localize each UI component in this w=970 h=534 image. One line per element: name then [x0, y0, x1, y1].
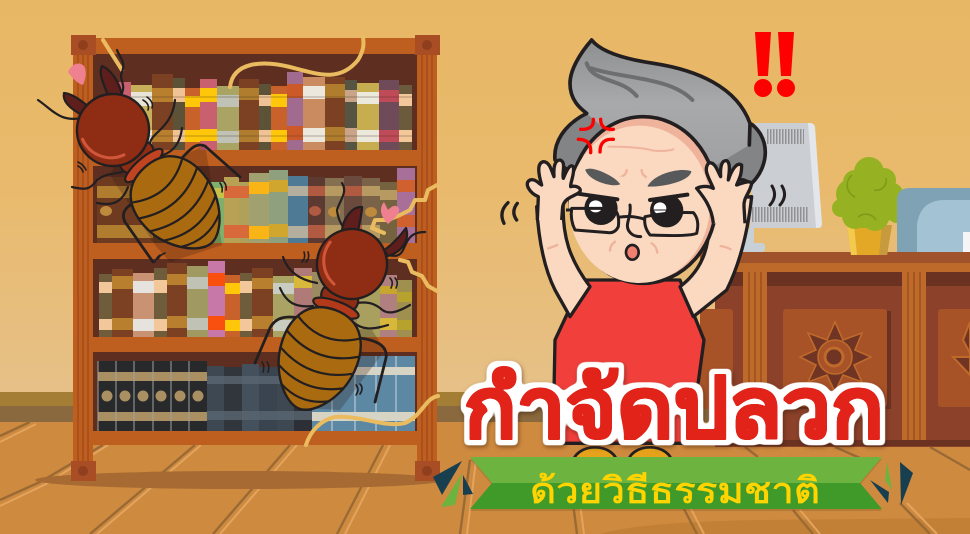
hair strands: [587, 63, 692, 100]
books row 1: [115, 72, 412, 150]
ribbon decoration right: [870, 462, 913, 505]
left column: [73, 55, 93, 462]
computer monitor: [740, 123, 822, 252]
shelf 1: [93, 150, 417, 166]
termite mandibles: [342, 207, 407, 256]
heart right: [381, 202, 399, 224]
left hand: [527, 160, 580, 220]
eyebrows: [586, 169, 691, 186]
termite shadow: [110, 145, 222, 262]
books row 3: [99, 261, 412, 337]
shelf 3: [93, 337, 417, 352]
anger mark: [578, 119, 613, 153]
heart left: [68, 64, 86, 85]
right arm: [680, 197, 752, 317]
termite upper left: [38, 50, 241, 269]
desk column right: [902, 272, 926, 440]
books row 4: [98, 356, 415, 431]
shirt: [553, 280, 704, 443]
shelf 2: [93, 243, 417, 259]
termite body: [60, 77, 241, 269]
back hair: [555, 87, 765, 183]
termite motion marks: [78, 97, 226, 262]
desk: [700, 252, 970, 447]
blue armchair: [897, 188, 970, 252]
bookcase top bar: [78, 38, 433, 54]
ribbon banner: [470, 457, 882, 511]
bookcase floor shadow: [35, 471, 445, 489]
shelf 4: [93, 431, 417, 445]
wooden floor: [0, 422, 970, 534]
termite shadow: [300, 325, 385, 410]
corner block top right: [415, 35, 440, 55]
termite trail squiggles: [103, 37, 438, 445]
nose: [627, 205, 641, 237]
bookcase: [71, 35, 440, 481]
motion marks left: [502, 203, 517, 223]
books row 2: [97, 168, 415, 243]
foot left: [71, 461, 96, 481]
termite mandibles: [64, 66, 122, 116]
termite motion marks: [262, 252, 397, 395]
desk panel left: [700, 309, 733, 409]
exclamation marks: [754, 32, 795, 97]
desk panel right with star: [938, 309, 970, 407]
desk panel centre with star: [783, 309, 891, 409]
foot right: [415, 461, 440, 481]
front hair: [570, 40, 750, 167]
feet: [573, 447, 672, 479]
monitor motion marks: [770, 186, 785, 205]
ribbon decoration left: [433, 461, 473, 507]
termite legs and antennae: [38, 50, 240, 262]
right column: [417, 55, 437, 462]
right hand: [697, 161, 752, 223]
desk column left: [743, 272, 767, 440]
bookcase back panel: [93, 52, 417, 437]
wall background: [0, 0, 970, 392]
mouth: [626, 245, 639, 260]
termite centre right: [255, 183, 425, 422]
termite legs and antennae: [255, 183, 425, 402]
face: [569, 117, 717, 283]
title: กำจัดปลวก: [464, 361, 884, 455]
termite body: [262, 218, 401, 422]
angry man: [502, 40, 765, 479]
left arm: [537, 200, 590, 317]
potted plant: [832, 157, 907, 255]
arm creases: [548, 245, 731, 249]
baseboard: [0, 392, 970, 423]
glasses: [566, 208, 698, 236]
eyes: [575, 177, 693, 227]
corner block top left: [71, 35, 96, 55]
ribbon subtitle: ด้วยวิธีธรรมชาติ: [530, 470, 820, 511]
